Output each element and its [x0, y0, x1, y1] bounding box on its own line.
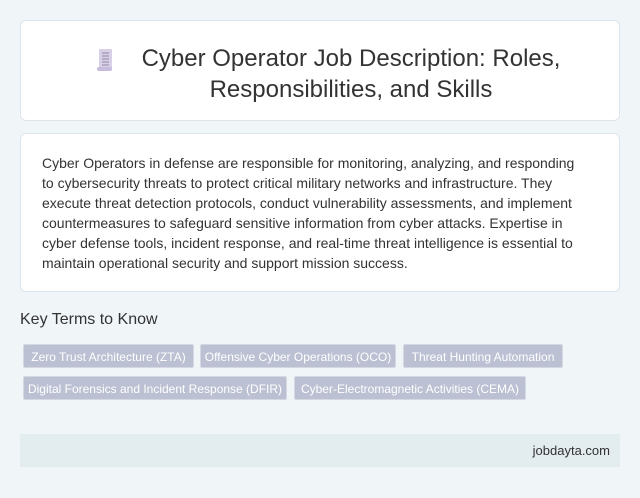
tag: DFIR: Digital Forensics and Incident Response (DFIR)	[28, 382, 282, 396]
tag: ZTA: Zero Trust Architecture (ZTA)	[31, 350, 186, 364]
footer	[20, 434, 620, 467]
tag: OCO: Offensive Cyber Operations (OCO)	[205, 350, 391, 364]
description text: execute threat detection protocols, conduct vulnerability assessments, and implement	[42, 195, 572, 211]
tag: CEMA	[294, 376, 526, 400]
tag: threat hunting: Threat Hunting Automation	[412, 350, 554, 364]
description text: cyber defense tools, incident response, and real-time threat intelligence is essential to	[42, 235, 573, 251]
footer text: jobdayta.com	[533, 443, 610, 458]
tag: threat hunting	[403, 344, 563, 368]
tag: CEMA: Cyber-Electromagnetic Activities (CEMA)	[301, 382, 519, 396]
heading: key terms: Key Terms to Know	[20, 311, 158, 328]
tag: DFIR	[23, 376, 287, 400]
description text: to cybersecurity threats to protect critical military networks and infrastructure. They	[42, 175, 552, 191]
description card	[20, 133, 620, 292]
description text: countermeasures to safeguard sensitive information from cyber attacks. Expertise in	[42, 215, 563, 231]
tag: OCO	[200, 344, 396, 368]
title card	[20, 20, 620, 121]
icon: document	[97, 49, 112, 71]
description text: maintain operational security and support mission success.	[42, 255, 408, 271]
description text	[42, 155, 574, 271]
title: Cyber Operator Job Description: Roles, Responsibilities, and Skills	[142, 45, 560, 103]
tag: ZTA	[23, 344, 194, 368]
description text: Cyber Operators in defense are responsible for monitoring, analyzing, and responding	[42, 155, 574, 171]
